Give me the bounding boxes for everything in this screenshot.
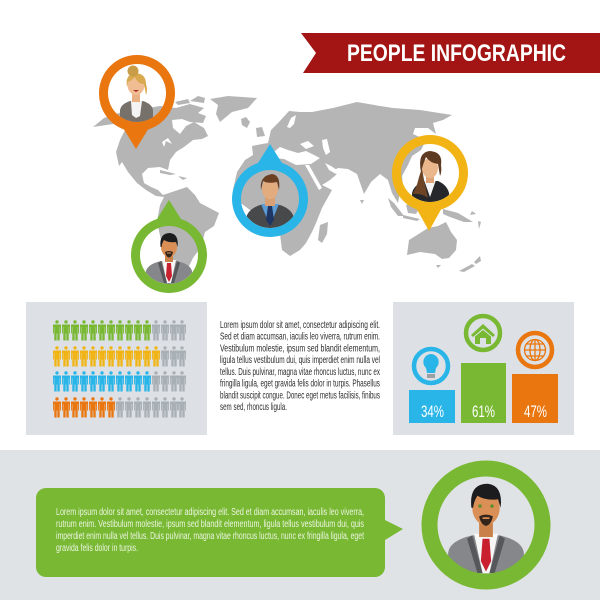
text block: center paragraph: Vestibulum molestie, ipsum sed blandit elementum, (220, 343, 380, 354)
world map (93, 96, 481, 287)
map pin: man with blue marker (232, 144, 308, 237)
icon: globe (518, 333, 552, 367)
text block: bubble paragraph (56, 507, 364, 554)
icon: house (466, 316, 500, 350)
text block: center paragraph: ligula tellus vestibulum dui, quis imperdiet enim nulla vel (220, 355, 380, 366)
panel: bar chart (393, 302, 574, 435)
row: orange people 7 of 15 (53, 397, 186, 418)
icon: light bulb (414, 349, 448, 383)
text block: bubble paragraph: rutrum enim. Vestibulum molestie, ipsum sed blandit elementum, ligula tellus vestibulum dui, quis (56, 519, 364, 530)
text block: center paragraph: Sed et diam accumsan, iaculis leo viverra, rutrum enim. (220, 332, 380, 343)
text block: center paragraph: tellus. Duis pulvinar, magna vitae rhoncus luctus, nunc ex (220, 367, 380, 378)
text block: center paragraph: Lorem ipsum dolor sit amet, consectetur adipiscing elit. (220, 320, 380, 331)
bar: 34% blue: 34% (421, 402, 444, 421)
text block: center paragraph: sem sed, rhoncus ligula. (220, 402, 287, 413)
map pin: woman with orange marker (99, 55, 175, 149)
map pin: man with green marker (131, 200, 207, 293)
text block: bubble paragraph: gravida felis dolor in turpis. (56, 543, 138, 554)
bottom band (0, 450, 600, 600)
bar: 34% blue (409, 390, 455, 423)
text block: bubble paragraph: imperdiet enim nulla vel tellus. Duis pulvinar, magna vitae rhoncus luctus, nunc ex fringilla ligula, eget (56, 531, 364, 542)
text block: bubble paragraph: Lorem ipsum dolor sit amet, consectetur adipiscing elit. Sed et diam accumsan, iaculis leo viverra, (56, 507, 364, 518)
portrait: large man in green ring (430, 468, 542, 582)
row: blue people 11 of 15 (53, 371, 186, 392)
map pin: woman with yellow marker (392, 135, 468, 231)
row: green people 11 of 15 (53, 320, 186, 340)
speech bubble (36, 488, 403, 577)
bar: 47% orange (512, 374, 558, 423)
text block: center paragraph: blandit suscipit congue. Donec eget metus facilisis, finibus (220, 390, 380, 401)
bar: 47% orange: 47% (524, 402, 547, 421)
bar: 61% green (461, 363, 506, 423)
row: yellow people 12 of 15 (53, 346, 186, 366)
panel: people pictogram chart (26, 302, 207, 435)
title banner (301, 33, 600, 73)
bar: 61% green: 61% (472, 402, 495, 421)
text block: center paragraph (220, 320, 380, 413)
text block: center paragraph: fringilla ligula, eget gravida felis dolor in turpis. Phasellus (220, 379, 380, 390)
